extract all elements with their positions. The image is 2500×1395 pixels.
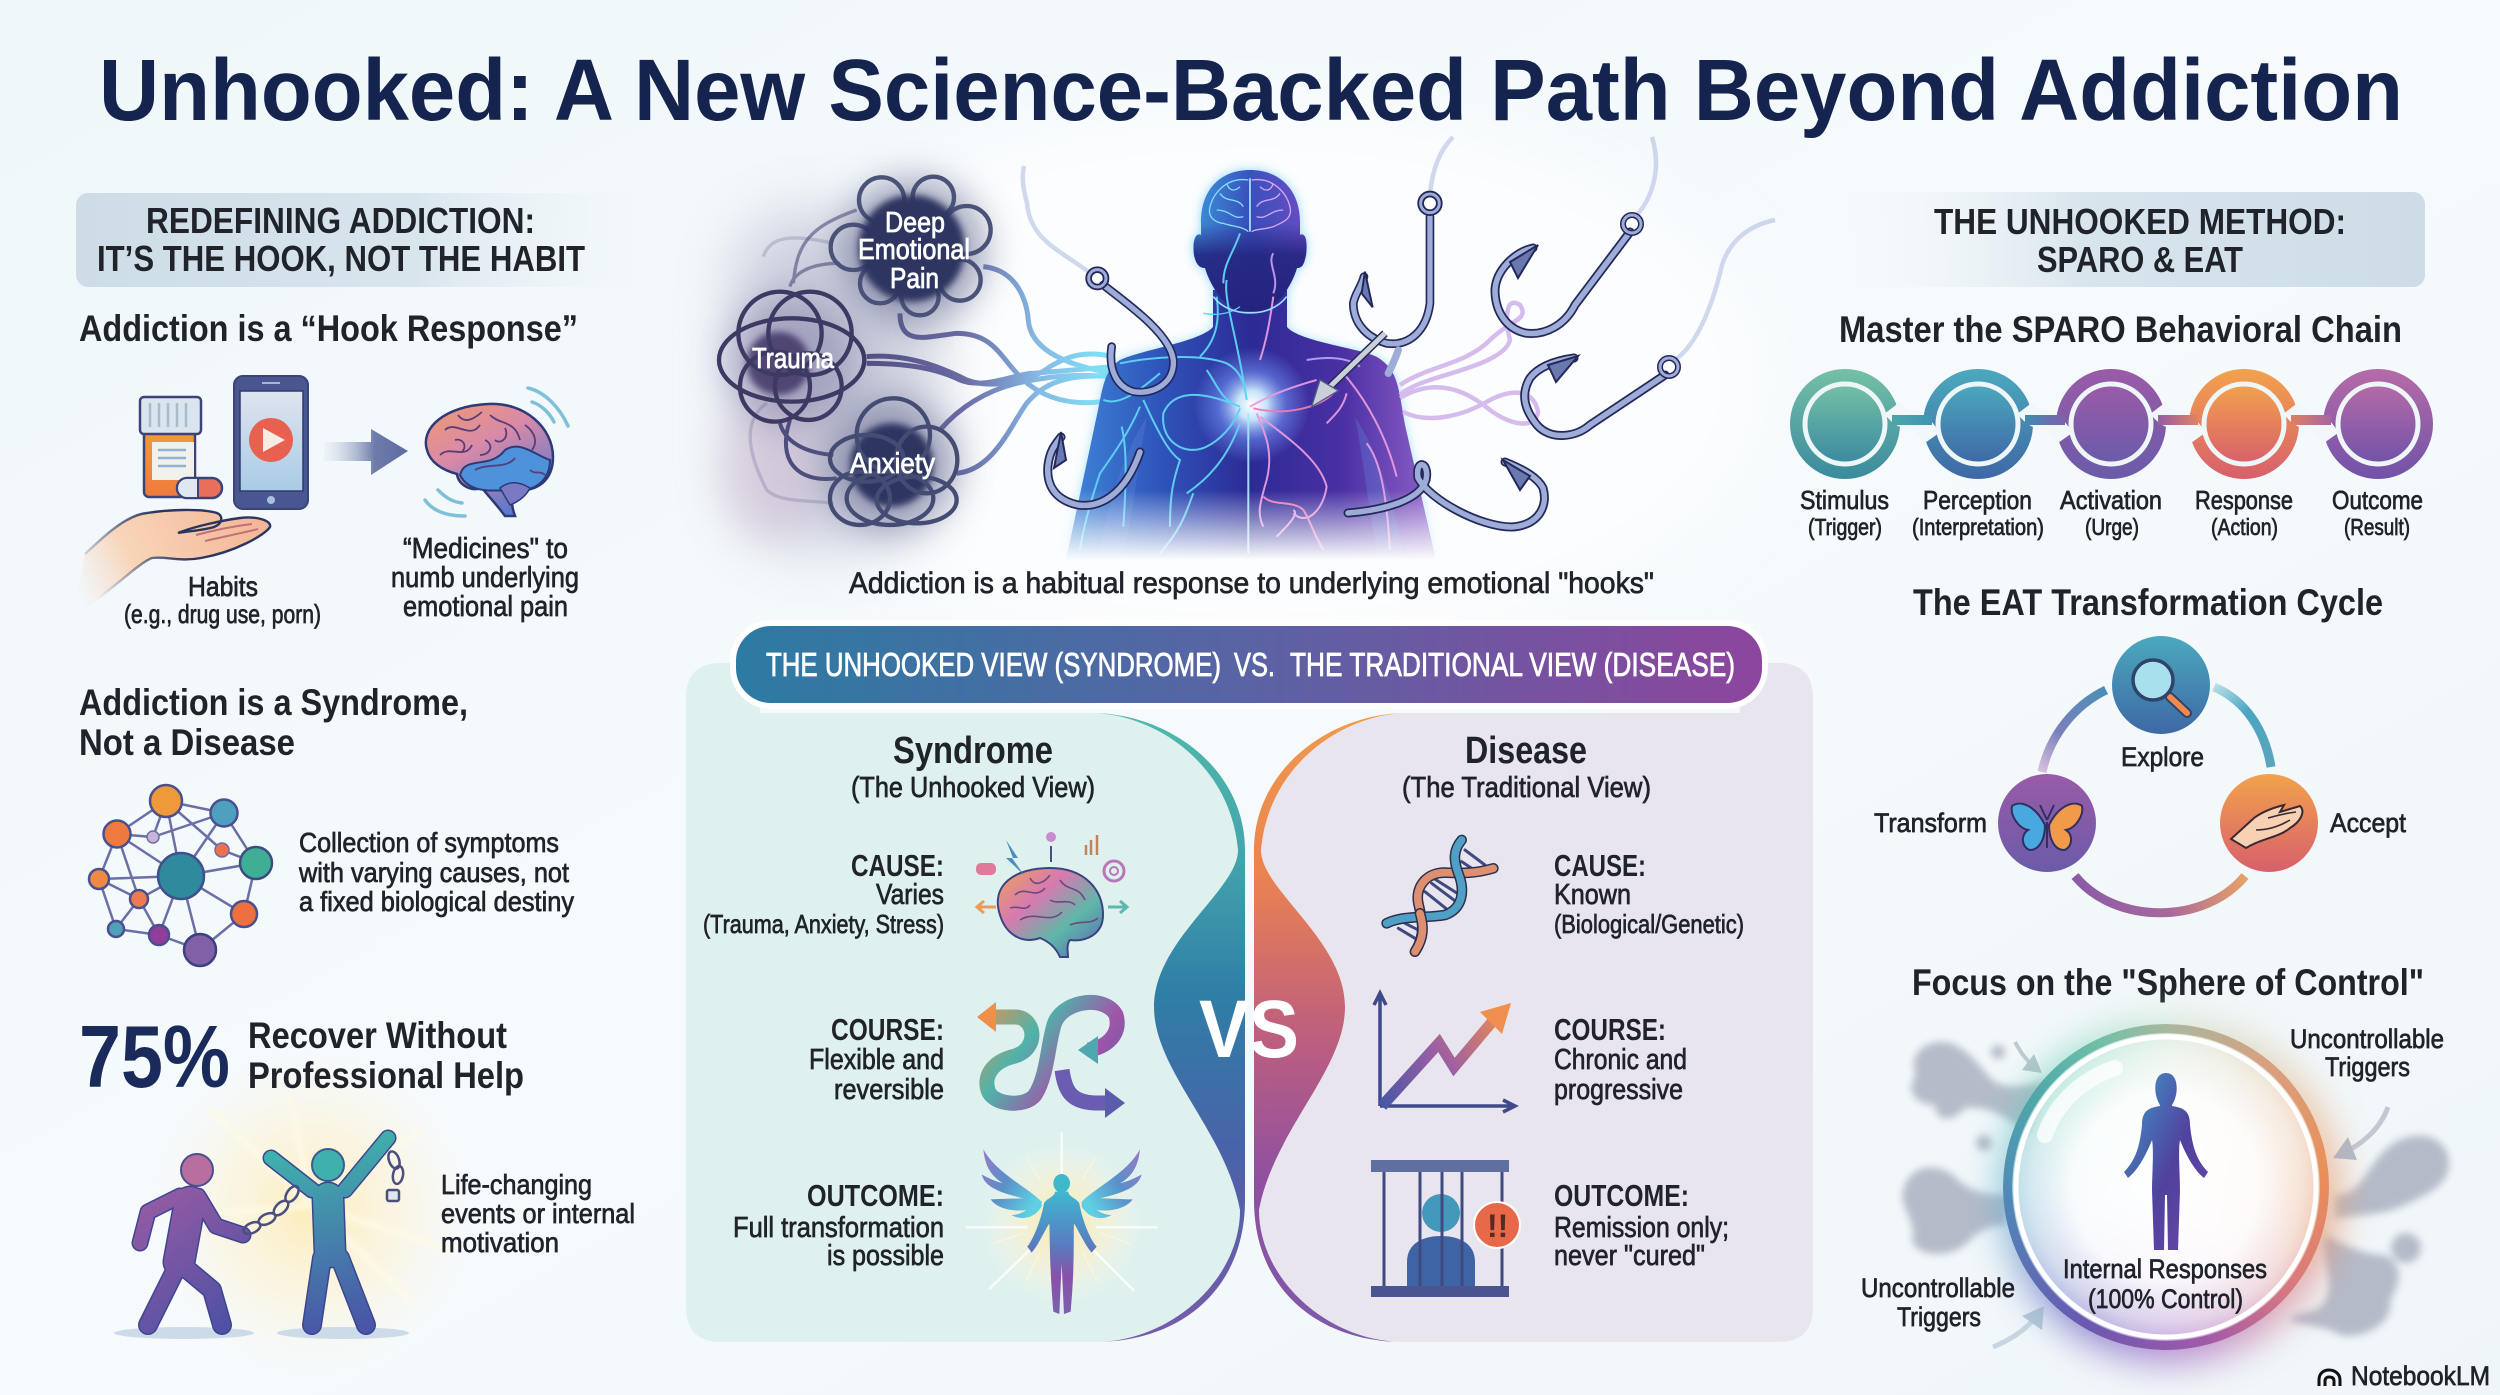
- arrows: triggers: [1993, 1042, 2388, 1347]
- labels: SPARO: (Interpretation): [1912, 514, 2044, 540]
- node: anxiety: Anxiety: [850, 448, 935, 480]
- labels: SPARO: (Result): [2344, 514, 2410, 540]
- text: syndrome outcome: [733, 1178, 944, 1272]
- badge: VS: VS: [1199, 984, 1299, 1075]
- text: disease course: Chronic and: [1554, 1044, 1687, 1076]
- step: response: [2189, 369, 2299, 479]
- labels: SPARO: [1800, 485, 2423, 540]
- hook: lower right: [1525, 356, 1678, 436]
- stat: 75 percent: 75%: [79, 1007, 230, 1106]
- banner: unhooked method: SPARO & EAT: [2037, 239, 2243, 280]
- icon: transform butterfly: [1998, 774, 2096, 872]
- text: disease course: [1554, 1012, 1687, 1106]
- heading: sphere of control: Focus on the "Sphere of Control": [1912, 962, 2424, 1003]
- icon: winding arrows: [977, 1002, 1125, 1118]
- hook: upper left: [1089, 270, 1173, 392]
- text: habits: (e.g., drug use, porn): [124, 599, 321, 629]
- node: deep emotional pain: Deep: [885, 207, 945, 239]
- haze behind clouds: [720, 215, 935, 545]
- step: outcome: [2323, 369, 2433, 479]
- text: disease outcome: [1554, 1178, 1729, 1272]
- icon: caged person: [1371, 1160, 1520, 1297]
- sphere interior: [2011, 1032, 2321, 1342]
- connectors between steps: [1892, 408, 2331, 438]
- highlight: [2045, 1068, 2115, 1135]
- text: lower triggers: [1861, 1273, 2015, 1332]
- step: activation: [2056, 369, 2166, 479]
- hook: lower left: [1048, 432, 1140, 505]
- text: syndrome course: reversible: [834, 1074, 944, 1106]
- text: syndrome course: [809, 1012, 944, 1106]
- heading: syndrome not disease: Addiction is a Syndrome,: [79, 682, 468, 723]
- text: collection of symptoms: a fixed biological destiny: [299, 886, 574, 917]
- text: collection of symptoms: [298, 827, 574, 917]
- heading: EAT cycle: The EAT Transformation Cycle: [1913, 582, 2383, 623]
- text: syndrome outcome: Full transformation: [733, 1212, 944, 1244]
- title: Unhooked: A New Science-Backed Path Beyond Addiction: [99, 42, 2403, 139]
- banner: unhooked method: THE UNHOOKED METHOD:: [1934, 201, 2346, 242]
- labels: SPARO: (Trigger): [1808, 514, 1882, 540]
- heading: syndrome not disease: [79, 682, 468, 763]
- text: lower triggers: Uncontrollable: [1861, 1273, 2015, 1303]
- illustration: emotional hooks and body: [719, 137, 1775, 600]
- text: internal responses: [2063, 1254, 2267, 1314]
- text: disease cause: Known: [1554, 879, 1631, 911]
- text: habits: [124, 571, 321, 629]
- text: lower triggers: Triggers: [1897, 1302, 1981, 1332]
- icon: brain with waves: [425, 388, 568, 516]
- text: upper triggers: Uncontrollable: [2290, 1024, 2444, 1054]
- text: disease course: progressive: [1554, 1074, 1683, 1106]
- illustration: breaking chains: [114, 1052, 472, 1372]
- icon: symptom network: [89, 785, 272, 966]
- icon: DNA helix: [1387, 840, 1493, 952]
- text: medicines: “Medicines" to: [403, 533, 568, 565]
- panel: redefining addiction: [76, 193, 646, 1372]
- text: syndrome outcome: OUTCOME:: [807, 1178, 944, 1213]
- text: internal responses: (100% Control): [2088, 1284, 2243, 1314]
- text: disease cause: CAUSE:: [1554, 848, 1646, 883]
- text: collection of symptoms: Collection of symptoms: [299, 827, 559, 858]
- hook: upper right: [1495, 215, 1641, 333]
- labels: SPARO: Stimulus: [1800, 485, 1889, 515]
- text: disease cause: [1554, 848, 1744, 939]
- labels: SPARO: Activation: [2060, 485, 2162, 515]
- body silhouette: [1066, 170, 1436, 560]
- labels: SPARO: Outcome: [2332, 485, 2423, 515]
- banner: redefining addiction: [76, 193, 646, 287]
- text: internal responses: Internal Responses: [2063, 1254, 2267, 1284]
- node: deep emotional pain: [831, 177, 991, 322]
- icon: accept hand: [2220, 774, 2318, 872]
- text: syndrome cause: Varies: [876, 879, 944, 911]
- colored ring: [2000, 1021, 2332, 1353]
- text: disease outcome: never "cured": [1554, 1240, 1705, 1272]
- text: syndrome course: COURSE:: [831, 1012, 944, 1047]
- banner: redefining addiction: IT’S THE HOOK, NOT THE HABIT: [97, 238, 585, 279]
- text: disease outcome: OUTCOME:: [1554, 1178, 1689, 1213]
- text: recover without professional help: Recover Without: [248, 1015, 507, 1056]
- diagram: sphere of control: [1861, 980, 2449, 1395]
- text: recover without professional help: [248, 1015, 524, 1096]
- header pill: VS.: [1234, 646, 1275, 683]
- text: disease course: COURSE:: [1554, 1012, 1666, 1047]
- text: syndrome cause: CAUSE:: [851, 848, 944, 883]
- icon: winged figure: [967, 1133, 1157, 1314]
- chart: rising trend: [1374, 993, 1515, 1112]
- text: life-changing events: [441, 1169, 635, 1258]
- labels: EAT: Transform: [1874, 808, 1987, 838]
- arcs: [2042, 687, 2271, 913]
- veins and brain: [1080, 178, 1397, 553]
- text: syndrome course: Flexible and: [809, 1044, 944, 1076]
- panel: syndrome background: [686, 663, 1240, 1342]
- panel: disease background: [1259, 663, 1813, 1342]
- labels: EAT: [1874, 742, 2406, 838]
- heading: SPARO chain: Master the SPARO Behavioral Chain: [1839, 309, 2402, 350]
- heading: hook response: Addiction is a “Hook Response”: [79, 308, 578, 349]
- labels: EAT: Explore: [2121, 742, 2204, 772]
- column heading: syndrome: [851, 730, 1095, 804]
- text: recover without professional help: Professional Help: [248, 1055, 524, 1096]
- header pill: THE UNHOOKED VIEW (SYNDROME): [766, 646, 1221, 683]
- node: trauma: Trauma: [752, 343, 835, 375]
- text: upper triggers: Triggers: [2325, 1052, 2410, 1082]
- hook: center vertical: [1353, 194, 1439, 373]
- labels: SPARO: (Urge): [2085, 514, 2139, 540]
- node: trauma: [719, 292, 864, 426]
- text: medicines: numb underlying: [391, 562, 579, 594]
- heading: syndrome not disease: Not a Disease: [79, 722, 295, 763]
- icon: pill bottle: [140, 397, 222, 498]
- diagram: EAT cycle: [1874, 636, 2406, 913]
- arrow: habits to medicines: [324, 429, 408, 475]
- icon: colorful brain: [976, 832, 1127, 957]
- text: syndrome outcome: is possible: [827, 1240, 944, 1272]
- text: habits: Habits: [188, 571, 258, 602]
- text: upper triggers: [2290, 1024, 2444, 1082]
- column heading: disease: [1402, 730, 1651, 804]
- icon: open hand: [76, 510, 270, 612]
- text: disease outcome: Remission only;: [1554, 1212, 1729, 1244]
- threads: body to hooks: [1400, 303, 1538, 424]
- text: life-changing events: motivation: [441, 1227, 559, 1258]
- text: syndrome cause: [703, 848, 944, 939]
- text: collection of symptoms: with varying causes, not: [298, 857, 569, 888]
- text: medicines: [391, 533, 579, 623]
- chain: SPARO: [1790, 369, 2433, 479]
- labels: SPARO: (Action): [2211, 514, 2278, 540]
- text: medicines: emotional pain: [403, 591, 568, 623]
- icon: caged person: !!: [1487, 1208, 1508, 1244]
- icon: phone: [234, 376, 308, 509]
- step: perception: [1923, 369, 2033, 479]
- header pill: THE TRADITIONAL VIEW (DISEASE): [1290, 646, 1735, 683]
- text: disease cause: (Biological/Genetic): [1554, 909, 1744, 939]
- labels: EAT: Accept: [2330, 808, 2406, 838]
- figure: person: [2124, 1073, 2208, 1250]
- labels: SPARO: Perception: [1923, 485, 2032, 515]
- arrow: hook barb into chest: [1312, 333, 1385, 407]
- text: life-changing events: Life-changing: [441, 1169, 592, 1200]
- node: deep emotional pain: Pain: [890, 263, 939, 295]
- column heading: disease: Disease: [1465, 730, 1587, 772]
- column heading: syndrome: Syndrome: [893, 730, 1053, 772]
- panel: unhooked method: [1790, 192, 2449, 1395]
- colored glow ring: [1960, 980, 2380, 1395]
- strings: fishing lines: [1023, 137, 1775, 362]
- band: disease curve: [1254, 713, 1408, 1342]
- smoke clouds: [1902, 1042, 2449, 1336]
- column heading: syndrome: (The Unhooked View): [851, 772, 1095, 804]
- node: anxiety: [825, 398, 957, 531]
- band: syndrome curve: [1091, 713, 1245, 1342]
- icon: explore magnifier: [2112, 636, 2210, 734]
- banner: redefining addiction: REDEFINING ADDICTION:: [146, 200, 535, 241]
- hook: lower right body: [1348, 460, 1544, 527]
- column heading: disease: (The Traditional View): [1402, 772, 1651, 804]
- caption: Addiction is a habitual response to underlying emotional "hooks": [849, 567, 1654, 600]
- text: life-changing events: events or internal: [441, 1198, 635, 1229]
- node: deep emotional pain: Emotional: [858, 234, 970, 266]
- step: stimulus: [1790, 369, 1900, 479]
- threads: clouds to body: [750, 210, 1113, 503]
- banner: unhooked method: [1850, 192, 2425, 287]
- text: syndrome cause: (Trauma, Anxiety, Stress): [703, 909, 944, 939]
- labels: SPARO: Response: [2195, 485, 2293, 515]
- panel: comparison: [686, 623, 1813, 1342]
- logo: NotebookLM: NotebookLM: [2351, 1361, 2490, 1391]
- header pill: [733, 623, 1765, 706]
